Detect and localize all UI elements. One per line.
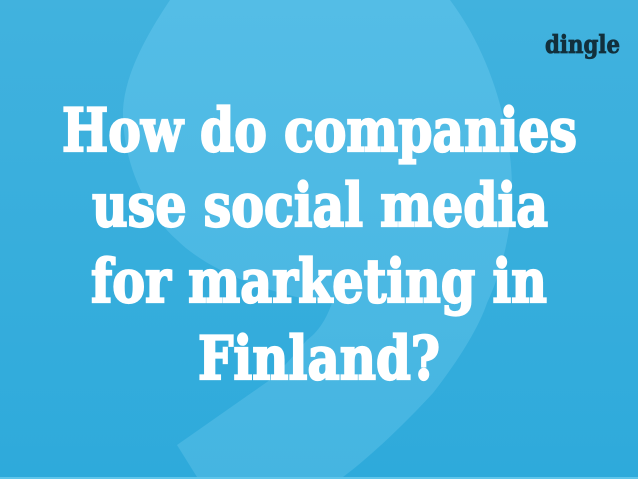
title: Finland? bbox=[198, 324, 440, 394]
bottom edge strip bbox=[0, 477, 638, 479]
logo: dingle: dingle bbox=[545, 30, 620, 59]
title bbox=[62, 96, 577, 394]
title: use social media bbox=[92, 171, 548, 241]
decorative comma shape bbox=[123, 0, 512, 477]
title: for marketing in bbox=[91, 247, 547, 317]
